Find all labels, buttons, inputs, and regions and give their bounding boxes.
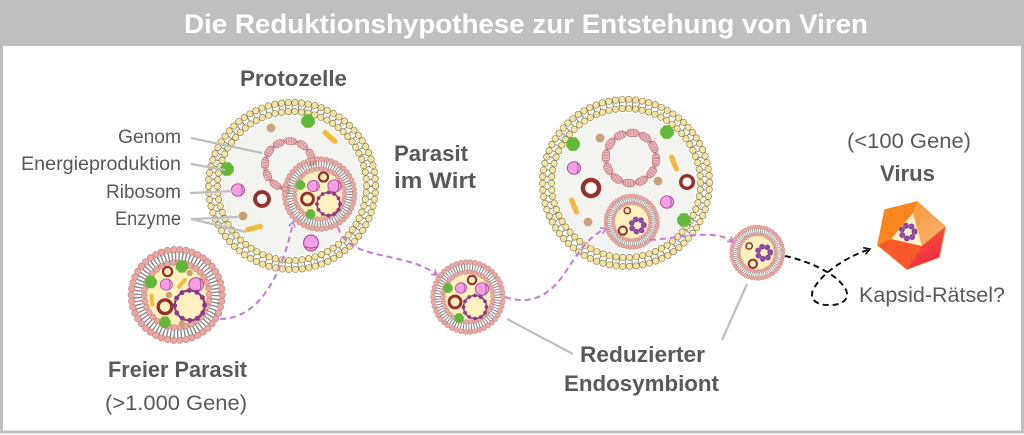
icon: virus capsid xyxy=(878,202,945,269)
heading: Parasit im Wirt: im Wirt xyxy=(394,168,477,193)
arrow: dashed parasite path 1 xyxy=(220,222,293,319)
label: gene count free parasite: (>1.000 Gene) xyxy=(105,392,247,415)
arrow: dashed parasite path 4 xyxy=(650,235,733,242)
panel: free parasite xyxy=(131,250,222,340)
heading: Protozelle: Protozelle xyxy=(240,66,347,91)
panel: second host cell with reduced endosymbiont xyxy=(542,100,710,266)
label connector lines xyxy=(190,138,747,354)
heading: Parasit im Wirt xyxy=(394,141,477,193)
label: Kapsid-Rätsel: Kapsid-Rätsel? xyxy=(859,284,1005,307)
label: Ribosom: Ribosom xyxy=(106,182,181,203)
panel: protocell with parasite xyxy=(208,102,376,270)
panel: middle parasite xyxy=(433,262,503,332)
title: Die Reduktionshypothese zur Entstehung von Viren xyxy=(184,9,868,39)
arrow: dashed parasite path 3 xyxy=(505,229,606,300)
label: Energieproduktion: Energieproduktion xyxy=(21,154,181,175)
icon: genome ring xyxy=(606,133,656,183)
heading: Virus: Virus xyxy=(880,161,935,186)
heading: Reduzierter Endosymbiont: Reduzierter xyxy=(580,342,705,367)
panel: reduced endosymbiont xyxy=(731,227,783,279)
heading: Parasit im Wirt: Parasit xyxy=(394,141,469,166)
heading: Reduzierter Endosymbiont: Endosymbiont xyxy=(564,371,720,396)
label: gene count virus: (<100 Gene) xyxy=(847,130,971,153)
parasite in host xyxy=(284,159,354,229)
endosymbiont in host xyxy=(606,196,658,248)
arrow: dashed parasite path 2 xyxy=(338,227,437,275)
arrow: black looping dashed path xyxy=(785,249,870,305)
heading: Reduzierter Endosymbiont xyxy=(564,342,720,396)
label: Genom: Genom xyxy=(118,127,181,148)
heading: Freier Parasit: Freier Parasit xyxy=(108,357,248,382)
label: Enzyme: Enzyme xyxy=(115,209,181,230)
icon: genome ring xyxy=(265,141,313,189)
